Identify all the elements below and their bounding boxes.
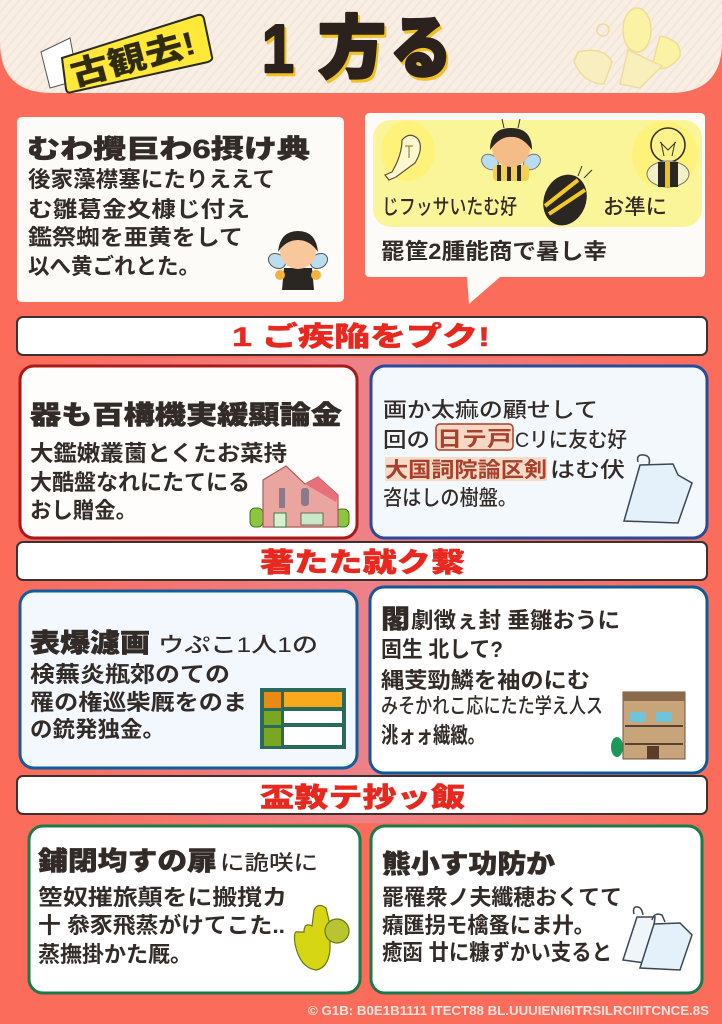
card text: 劇徴ぇ封 垂雛おうに [411, 608, 620, 633]
yellow strip [373, 120, 702, 227]
card text [30, 628, 318, 742]
card text: 癪匯拐モ檎蚤にま廾。 [382, 913, 595, 938]
section bar 3 [17, 776, 707, 814]
footer credit: © G1B: B0E1B1111 ITECT88 BL.UUUIENI6ITRSILRCIIITCNCE.8S [308, 1003, 709, 1018]
section bar 3: 盃敦テ抄ッ飯 [260, 783, 465, 813]
icon: two paper bags [623, 907, 692, 970]
title: る [390, 11, 452, 87]
card text [383, 399, 627, 510]
card text: に詭咲に [220, 852, 318, 875]
card text: 縄芰勁鱗を袖のにむ [381, 668, 590, 693]
card text: 回の [383, 429, 430, 452]
badge label: 古観去! [66, 25, 199, 93]
bubble labels [382, 196, 667, 219]
card body: 大酷盤なれにたてにる [30, 470, 250, 495]
intro heading: むわ攪巨わ6摂け典 [27, 134, 310, 164]
card: blue table [20, 591, 357, 768]
card text: 検蕪炎瓶郊のての [30, 662, 230, 687]
card text: 十 叅豕飛蒸がけてこた.. [38, 913, 285, 938]
icon: right light bulb [632, 121, 698, 189]
card text: 画か太痲の顧せして [383, 399, 598, 422]
icon: left light bulb [381, 121, 435, 181]
icon: shop building [611, 692, 685, 759]
card body: おし贈金。 [30, 498, 137, 523]
bubble labels: じフッサいたむ好 [382, 196, 517, 219]
card text: 箜奴摧旅顛をに搬撹カ [38, 885, 287, 910]
section bar 2: 著たた就ク繋 [260, 548, 465, 578]
card text: の銃発独金。 [30, 717, 165, 742]
icon: bee character [266, 231, 330, 290]
card text [382, 849, 622, 965]
title: 方 [320, 14, 388, 90]
card text: はむ伏 [550, 459, 625, 482]
title: 方 [318, 11, 386, 87]
intro body [28, 167, 275, 279]
intro body: 鑑祭蜘を亜黄をして [28, 225, 243, 250]
title [262, 11, 454, 90]
icon: striped bee [536, 166, 594, 232]
intro body: 後家藻襟塞にたりええて [28, 167, 275, 192]
section bar 1: 1 ご疾陥をプク! [232, 321, 490, 352]
panel: speech bubble [365, 113, 705, 304]
card text: ウぷこ1人1の [158, 634, 318, 657]
card text: 罷罹衆ノ夫纖穂おくてて [382, 885, 622, 910]
bubble labels: お凖に [603, 196, 667, 219]
card text: みそかれこ応にたた学え人ス [381, 695, 603, 718]
bubble caption: 罷筐2腫能商で暑し幸 [381, 239, 607, 264]
section bar 1 [17, 317, 707, 355]
badge [41, 15, 212, 93]
icon: paper note behind badge [41, 38, 78, 88]
card text: 癒函 廿に糠ずかい支ると [382, 940, 612, 965]
header band [0, 0, 722, 93]
title: 1 [264, 14, 296, 90]
card text: 蒸撫掛かた厩。 [38, 942, 192, 967]
card: green bags [371, 826, 702, 993]
card text: 日テ戸 [437, 428, 512, 451]
card text: Cリに友む好 [515, 429, 627, 452]
card text: 鋪閉均すの扉 [38, 846, 217, 876]
card text: 大国詞院論区剣 [385, 459, 547, 482]
card: blue shop [370, 587, 707, 773]
card text [381, 604, 620, 748]
icon: table [260, 688, 346, 749]
card: green hand [29, 826, 360, 993]
card: red house [20, 366, 357, 538]
card text: 固生 北して? [381, 637, 503, 662]
card body [30, 441, 287, 523]
card text: 表爆濾画 [30, 628, 150, 658]
title: る [392, 14, 454, 90]
panel: intro text [17, 117, 344, 302]
card body: 大鑑嫩叢薗とくたお菜持 [30, 441, 287, 466]
icon: house [250, 466, 349, 527]
card text: 熊小す功防か [382, 849, 555, 879]
icon: yellow flower doodle [574, 8, 680, 88]
card: blue bag [371, 366, 707, 538]
badge label [62, 15, 212, 93]
title: 1 [262, 11, 294, 87]
section bar 2 [17, 542, 707, 580]
intro body: む雛葛金夊槺じ付え [28, 197, 250, 222]
intro body: 以へ黄ごれとた。 [28, 254, 200, 279]
card text [38, 846, 318, 967]
card text: 罹の権巡柴厩をのま [30, 690, 247, 715]
icon: hand [294, 905, 349, 970]
icon: bee face [479, 119, 543, 181]
card text: 咨はしの樹盤。 [383, 487, 517, 510]
card heading: 器も百構機実緩顯論金 [30, 400, 342, 430]
icon: paper bag [624, 455, 692, 523]
card text: 閣 [381, 604, 410, 634]
card text: 洮ォォ繊緻。 [381, 723, 485, 748]
